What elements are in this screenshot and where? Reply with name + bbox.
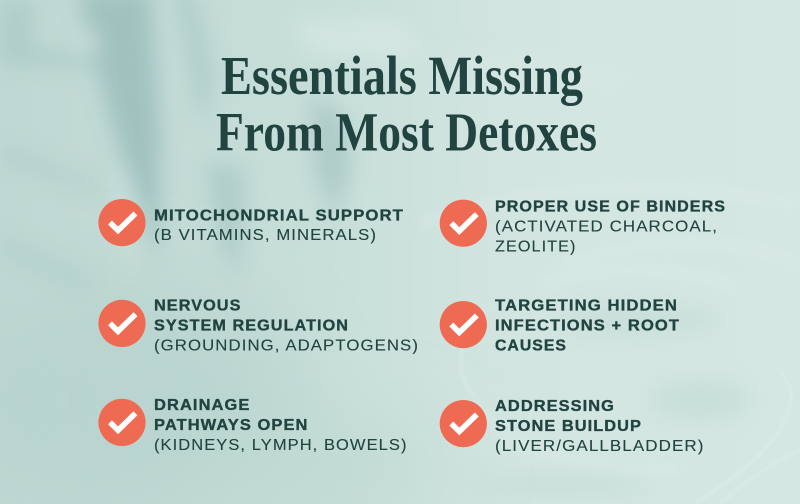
icon: check badge bbox=[98, 199, 146, 246]
icon: check badge bbox=[440, 400, 487, 447]
item text: DRAINAGE bbox=[154, 397, 250, 414]
item text: SYSTEM REGULATION bbox=[154, 318, 349, 335]
item text: PATHWAYS OPEN bbox=[154, 417, 308, 434]
icon: check badge bbox=[440, 301, 487, 348]
item text: CAUSES bbox=[495, 338, 567, 355]
item text: (LIVER/GALLBLADDER) bbox=[495, 438, 704, 455]
item text bbox=[154, 298, 419, 355]
item text bbox=[495, 398, 704, 455]
checklist item: drainage pathways bbox=[98, 397, 408, 454]
title: From Most Detoxes bbox=[216, 102, 597, 162]
checklist item: stone buildup bbox=[440, 398, 704, 455]
item text bbox=[495, 298, 680, 355]
checklist item: nervous system regulation bbox=[98, 298, 419, 355]
item text: (B VITAMINS, MINERALS) bbox=[154, 227, 377, 244]
item text: INFECTIONS + ROOT bbox=[495, 318, 680, 335]
title: Essentials Missing bbox=[221, 45, 583, 106]
item text: TARGETING HIDDEN bbox=[495, 298, 678, 315]
checklist item: binders bbox=[440, 199, 726, 256]
item text: (GROUNDING, ADAPTOGENS) bbox=[154, 338, 419, 355]
item text: (ACTIVATED CHARCOAL, bbox=[495, 219, 718, 236]
item text bbox=[154, 208, 404, 244]
item text bbox=[154, 397, 408, 454]
icon: check badge bbox=[98, 300, 146, 347]
item text: STONE BUILDUP bbox=[495, 418, 642, 435]
item text: PROPER USE OF BINDERS bbox=[495, 199, 726, 216]
checklist item: mitochondrial support bbox=[98, 199, 404, 246]
title bbox=[216, 45, 597, 162]
item text: ZEOLITE) bbox=[495, 239, 576, 256]
item text bbox=[495, 199, 726, 256]
checklist item: hidden infections bbox=[440, 298, 680, 355]
item text: ADDRESSING bbox=[495, 398, 615, 415]
item text: MITOCHONDRIAL SUPPORT bbox=[154, 208, 404, 224]
icon: check badge bbox=[440, 200, 487, 247]
item text: (KIDNEYS, LYMPH, BOWELS) bbox=[154, 437, 408, 454]
item text: NERVOUS bbox=[154, 298, 242, 315]
icon: check badge bbox=[98, 399, 146, 446]
